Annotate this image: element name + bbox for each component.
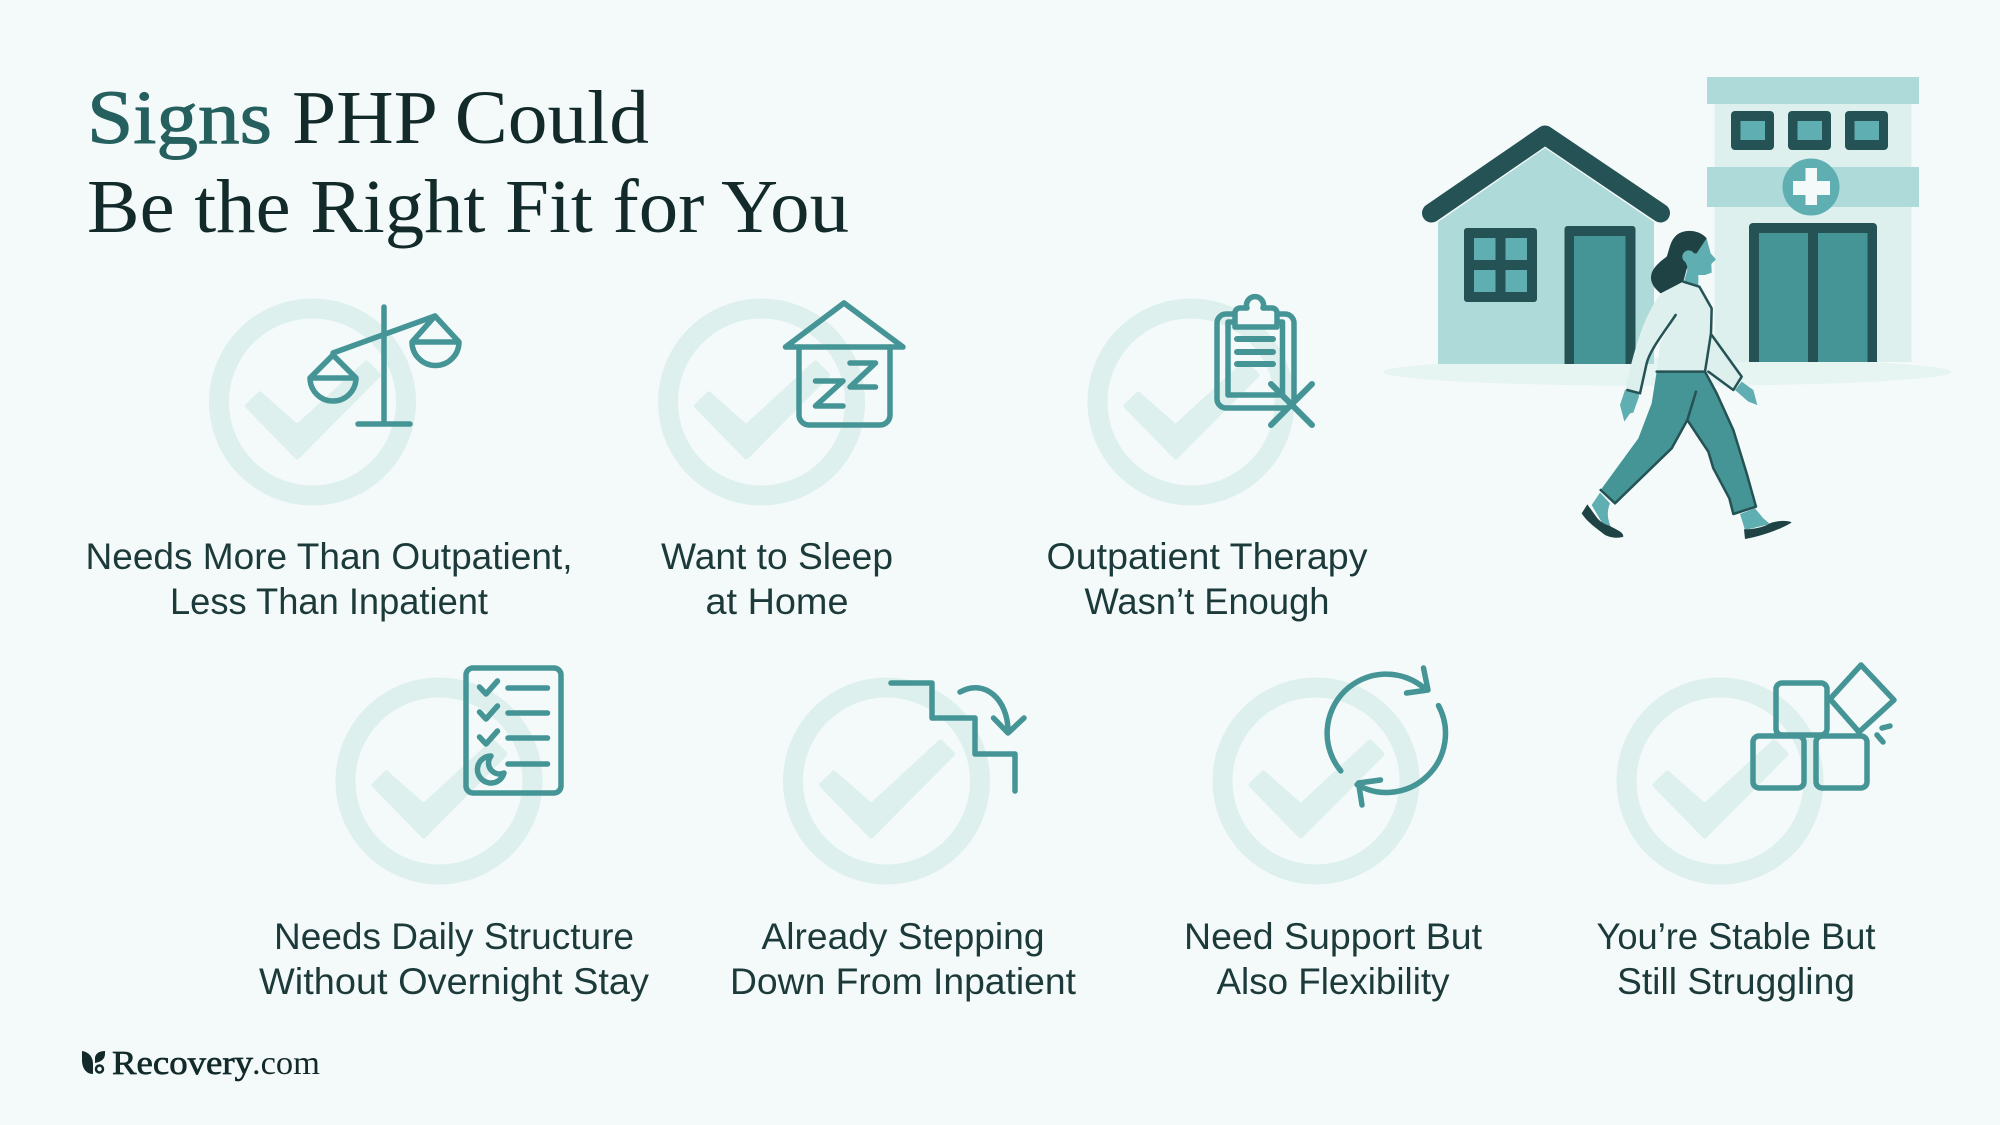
label [730, 916, 1077, 1002]
label [1046, 536, 1368, 622]
wordmark [112, 1045, 320, 1082]
icon: balance scale [310, 307, 459, 424]
label: Needs More Than Outpatient, [86, 536, 572, 577]
ground shadow [1384, 358, 1952, 386]
label: Need Support But [1184, 916, 1483, 957]
check badge [1222, 688, 1410, 874]
title: Be the Right Fit for You [87, 165, 849, 249]
wordmark: Recovery [112, 1045, 253, 1082]
label: Already Stepping [762, 916, 1044, 957]
lower body [1582, 372, 1792, 539]
label: Wasn’t Enough [1084, 581, 1330, 622]
hospital building [1707, 77, 1919, 362]
icon: house with zzz [786, 303, 903, 425]
label [259, 916, 650, 1002]
icon: stairs with arrow [891, 683, 1024, 791]
title: PHP Could [292, 76, 649, 160]
icon: leaf mark [82, 1051, 105, 1074]
label: Outpatient Therapy [1046, 536, 1368, 577]
label: Down From Inpatient [730, 961, 1077, 1002]
title: Signs [87, 76, 272, 160]
illustration: woman walking between home and hospital [1384, 77, 1952, 539]
label [86, 536, 572, 622]
wordmark: .com [252, 1045, 320, 1082]
label: Needs Daily Structure [274, 916, 634, 957]
label: Also Flexibility [1216, 961, 1450, 1002]
check badge [219, 308, 406, 496]
icon: clipboard with x [1217, 297, 1312, 425]
woman walking [1582, 231, 1792, 539]
item: needs daily structure [259, 668, 650, 1002]
item: stepping down from inpatient [730, 683, 1077, 1002]
check badge [346, 688, 532, 874]
item: support and flexibility [1184, 668, 1483, 1002]
label [661, 536, 893, 622]
label: at Home [706, 581, 848, 622]
item: outpatient therapy wasn't enough [1046, 297, 1368, 622]
item: stable but struggling [1596, 665, 1894, 1002]
item: want to sleep at home [661, 303, 903, 622]
house [1432, 135, 1660, 364]
icon: stacked blocks [1753, 665, 1894, 788]
label: Want to Sleep [661, 536, 893, 577]
item: needs more than outpatient [86, 307, 572, 622]
logo: Recovery.com [82, 1045, 320, 1082]
label [1596, 916, 1876, 1002]
icon: circular arrows [1327, 668, 1445, 805]
check badge [668, 308, 855, 496]
label [1184, 916, 1483, 1002]
label: Without Overnight Stay [259, 961, 650, 1002]
icon: checklist [466, 668, 561, 793]
upper body [1620, 231, 1757, 422]
check badge [1098, 308, 1284, 496]
check badge [793, 688, 980, 874]
label: Less Than Inpatient [170, 581, 489, 622]
title [87, 76, 849, 249]
label: Still Struggling [1617, 961, 1855, 1002]
check badge [1626, 688, 1814, 874]
label: You’re Stable But [1596, 916, 1876, 957]
